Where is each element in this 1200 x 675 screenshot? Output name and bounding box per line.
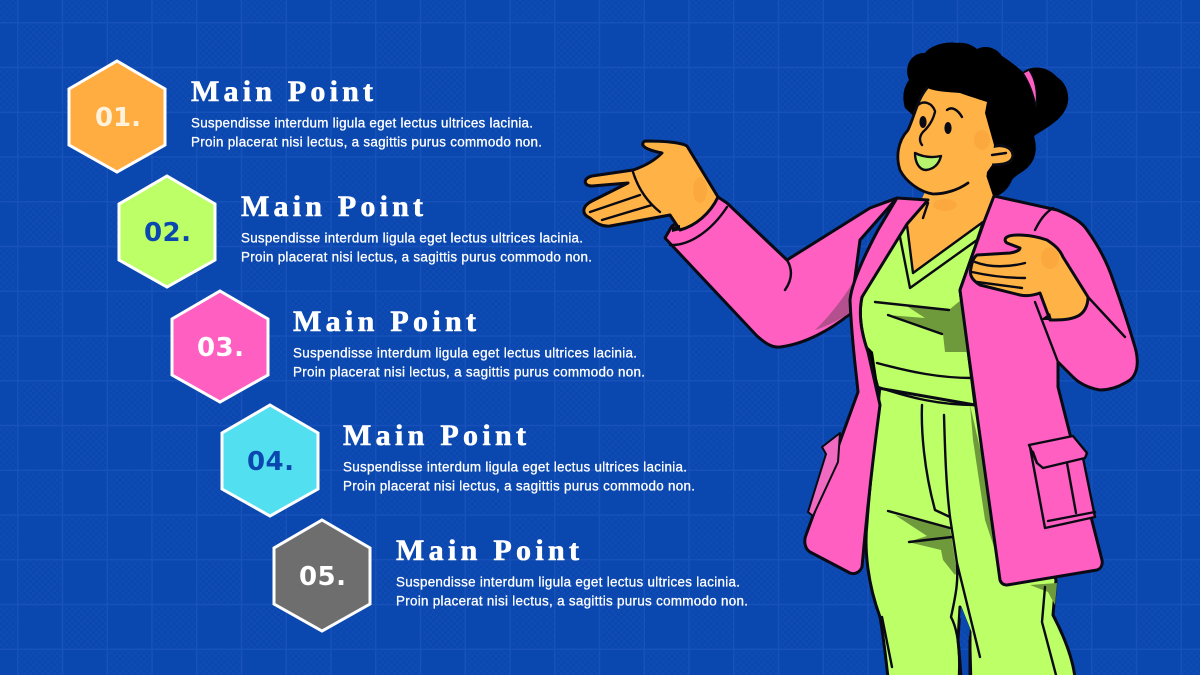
left pocket [808, 433, 840, 516]
gesturing hand [970, 235, 1088, 320]
description 05 [396, 574, 748, 608]
pants folds [882, 405, 1056, 675]
hexagon 03: 03. [197, 333, 244, 363]
ear [990, 146, 1013, 165]
hexagon 01 [69, 61, 165, 172]
list item 01 [69, 61, 542, 172]
description 01: Proin placerat nisi lectus, a sagittis purus commodo non. [191, 134, 542, 150]
description 01: Suspendisse interdum ligula eget lectus ultrices lacinia. [191, 116, 533, 130]
mouth [915, 153, 941, 170]
sleeve fold and cuff lines [670, 207, 791, 290]
right jacket panel and sleeve [960, 196, 1137, 585]
description 04: Suspendisse interdum ligula eget lectus ultrices lacinia. [343, 460, 687, 474]
blue leg gap [960, 606, 970, 640]
description 03: Proin placerat nisi lectus, a sagittis purus commodo non. [293, 364, 645, 380]
list item 02 [119, 176, 592, 287]
left jacket panel [805, 198, 928, 574]
v-neck collar [899, 222, 983, 288]
heading 01: Main Point [191, 75, 373, 108]
hair [903, 43, 1068, 197]
pointing hand [584, 141, 718, 232]
neck blush [933, 199, 957, 211]
top fold lines [875, 302, 949, 334]
description 02 [241, 230, 592, 264]
pants [866, 385, 1075, 675]
heading 02: Main Point [241, 190, 423, 223]
sleeve shadow [815, 276, 857, 330]
waist belt lines [877, 363, 975, 405]
hexagon 01: 01. [95, 103, 141, 133]
heading 05: Main Point [396, 534, 579, 567]
description 04: Proin placerat nisi lectus, a sagittis purus commodo non. [343, 478, 695, 494]
description 05: Suspendisse interdum ligula eget lectus ultrices lacinia. [396, 574, 740, 590]
description 01 [191, 116, 542, 150]
description 05: Proin placerat nisi lectus, a sagittis purus commodo non. [396, 594, 748, 608]
right pocket [1029, 436, 1095, 528]
hexagon 02 [119, 176, 215, 287]
head [898, 88, 1013, 218]
eyebrows and nose [918, 103, 962, 145]
illustration: presenting woman [584, 43, 1137, 675]
heading 04: Main Point [343, 419, 526, 452]
description 04 [343, 460, 695, 494]
face [898, 88, 994, 197]
pants shadow [895, 405, 1057, 605]
heading 03: Main Point [293, 305, 476, 338]
description 03: Suspendisse interdum ligula eget lectus ultrices lacinia. [293, 346, 637, 360]
neck and chest [907, 175, 993, 273]
pointing arm [665, 197, 897, 347]
top black shade [866, 345, 878, 385]
hexagon 02: 02. [144, 218, 191, 248]
list item 05 [274, 520, 748, 631]
neck line and ear line [923, 153, 1006, 218]
green top [860, 222, 984, 405]
description 02: Proin placerat nisi lectus, a sagittis purus commodo non. [241, 250, 592, 264]
description 02: Suspendisse interdum ligula eget lectus ultrices lacinia. [241, 230, 583, 246]
hexagon 03 [172, 291, 268, 402]
hexagon 04 [222, 405, 318, 516]
top shadow [888, 300, 969, 352]
description 03 [293, 346, 645, 380]
face outline [898, 88, 968, 194]
eyes [919, 116, 952, 134]
list item 04 [222, 405, 695, 516]
hexagon 05: 05. [299, 562, 346, 592]
cheek blush [974, 130, 990, 150]
hexagon 04: 04. [247, 447, 294, 477]
list item 03 [172, 291, 645, 402]
hexagon 05 [274, 520, 370, 631]
hair tie [1023, 70, 1037, 107]
